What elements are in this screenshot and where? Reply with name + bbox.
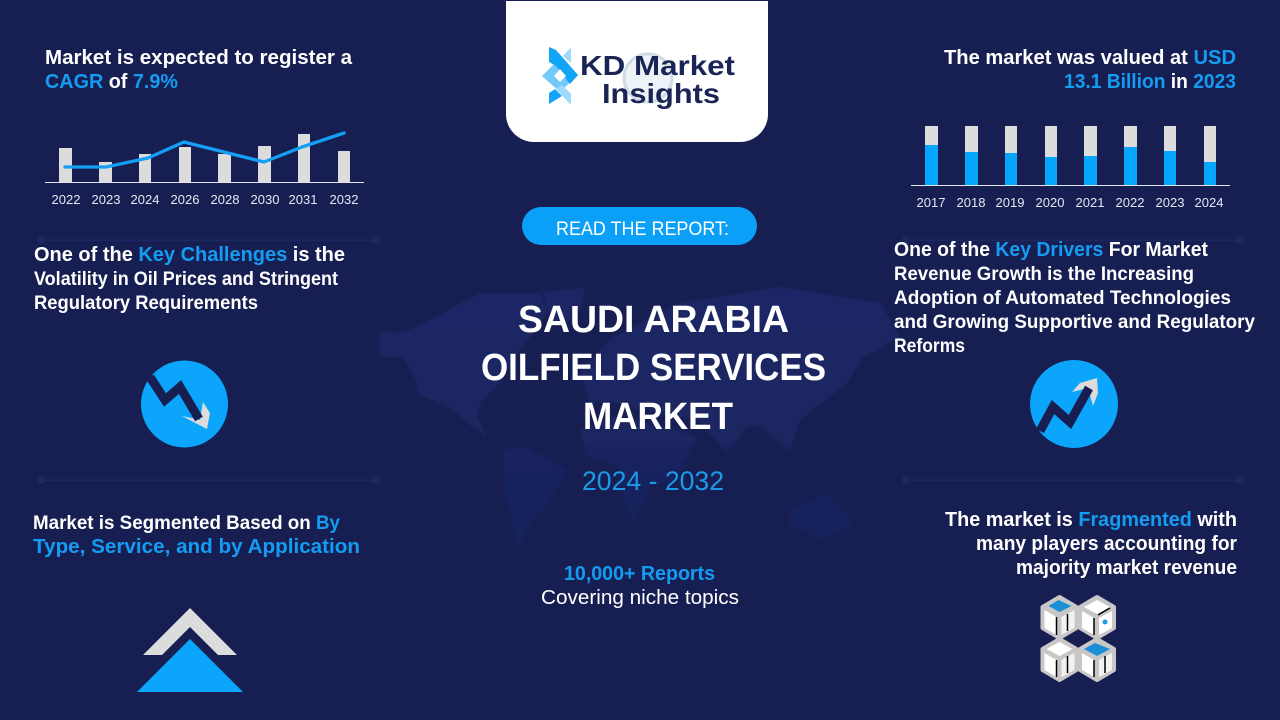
bar and line chart: CAGR 2022-2032: 2030 <box>251 192 279 207</box>
text: key drivers: One of the Key Drivers For Market <box>894 239 1208 261</box>
text: segmentation: Market is Segmented Based on By <box>33 513 340 534</box>
title: SAUDI ARABIA <box>518 299 789 341</box>
bar and line chart: CAGR 2022-2032: 2031 <box>289 192 317 207</box>
button: read the report <box>522 207 757 245</box>
icon: upward trend <box>1030 360 1118 448</box>
logo card <box>506 1 768 142</box>
logo wordmark: KD Market <box>580 50 735 81</box>
text: market value <box>944 47 1236 93</box>
logo mark <box>542 47 578 105</box>
text: segmentation <box>33 513 360 558</box>
logo wordmark: Insights <box>602 78 720 109</box>
stacked bar chart: 2017-2024: 2023 <box>1156 195 1184 210</box>
bar and line chart: CAGR 2022-2032: 2028 <box>211 192 239 207</box>
icon: four cubes <box>1042 597 1114 680</box>
divider left upper <box>37 236 380 244</box>
text: CAGR statement: CAGR of 7.9% <box>45 71 178 93</box>
divider right upper <box>902 236 1244 244</box>
bar and line chart: CAGR 2022-2032 <box>45 133 364 207</box>
text: key drivers: Adoption of Automated Technologies <box>894 288 1231 309</box>
button: read the report: READ THE REPORT: <box>556 219 729 240</box>
logo wordmark <box>580 50 735 109</box>
stacked bar chart: 2017-2024: 2021 <box>1076 195 1104 210</box>
stacked bar chart: 2017-2024: 2017 <box>917 195 945 210</box>
reports count: Covering niche topics <box>541 587 739 609</box>
icon: downward trend <box>141 360 228 448</box>
title: MARKET <box>583 396 733 438</box>
text: fragmented market: The market is Fragmented with <box>945 509 1237 531</box>
text: fragmented market: many players accounting for <box>976 533 1237 555</box>
text: segmentation: Type, Service, and by Application <box>33 536 360 558</box>
cube top right <box>1080 597 1114 638</box>
text: key drivers <box>894 239 1255 357</box>
icon: layered chevron pyramid <box>137 608 243 692</box>
text: key drivers: Revenue Growth is the Increasing <box>894 264 1194 285</box>
divider left lower <box>37 476 380 484</box>
bar and line chart: CAGR 2022-2032: 2023 <box>92 192 120 207</box>
title: OILFIELD SERVICES <box>481 347 826 389</box>
logo watermark <box>624 54 672 102</box>
text: key challenges: Regulatory Requirements <box>34 293 258 314</box>
text: key challenges: One of the Key Challenges is the <box>34 244 345 266</box>
text: market value: The market was valued at USD <box>944 47 1236 69</box>
text: market value: 13.1 Billion in 2023 <box>1064 71 1236 93</box>
divider right lower <box>902 476 1244 484</box>
stacked bar chart: 2017-2024: 2018 <box>957 195 985 210</box>
stacked bar chart: 2017-2024: 2022 <box>1116 195 1144 210</box>
bar and line chart: CAGR 2022-2032: 2026 <box>171 192 199 207</box>
text: key drivers: Reforms <box>894 336 965 357</box>
cube bottom left <box>1042 639 1076 680</box>
text: fragmented market <box>945 509 1237 579</box>
cube top left <box>1042 597 1076 638</box>
stacked bar chart: 2017-2024 <box>911 126 1230 210</box>
reports count <box>541 563 739 609</box>
background world map <box>380 287 900 552</box>
text: CAGR statement: Market is expected to register a <box>45 47 353 69</box>
text: fragmented market: majority market revenue <box>1016 557 1237 579</box>
text: CAGR statement <box>45 47 353 93</box>
text: key challenges: Volatility in Oil Prices and Stringent <box>34 269 339 290</box>
bar and line chart: CAGR 2022-2032: 2022 <box>52 192 80 207</box>
text: key drivers: and Growing Supportive and Regulatory <box>894 312 1255 333</box>
text: key challenges <box>34 244 345 314</box>
stacked bar chart: 2017-2024: 2020 <box>1036 195 1064 210</box>
bar and line chart: CAGR 2022-2032: 2032 <box>330 192 358 207</box>
stacked bar chart: 2017-2024: 2024 <box>1195 195 1223 210</box>
stacked bar chart: 2017-2024: 2019 <box>996 195 1024 210</box>
cube bottom right <box>1080 639 1114 680</box>
forecast years: 2024 - 2032 <box>582 466 724 496</box>
bar and line chart: CAGR 2022-2032: 2024 <box>131 192 159 207</box>
title <box>481 299 826 438</box>
reports count: 10,000+ Reports <box>564 563 715 585</box>
